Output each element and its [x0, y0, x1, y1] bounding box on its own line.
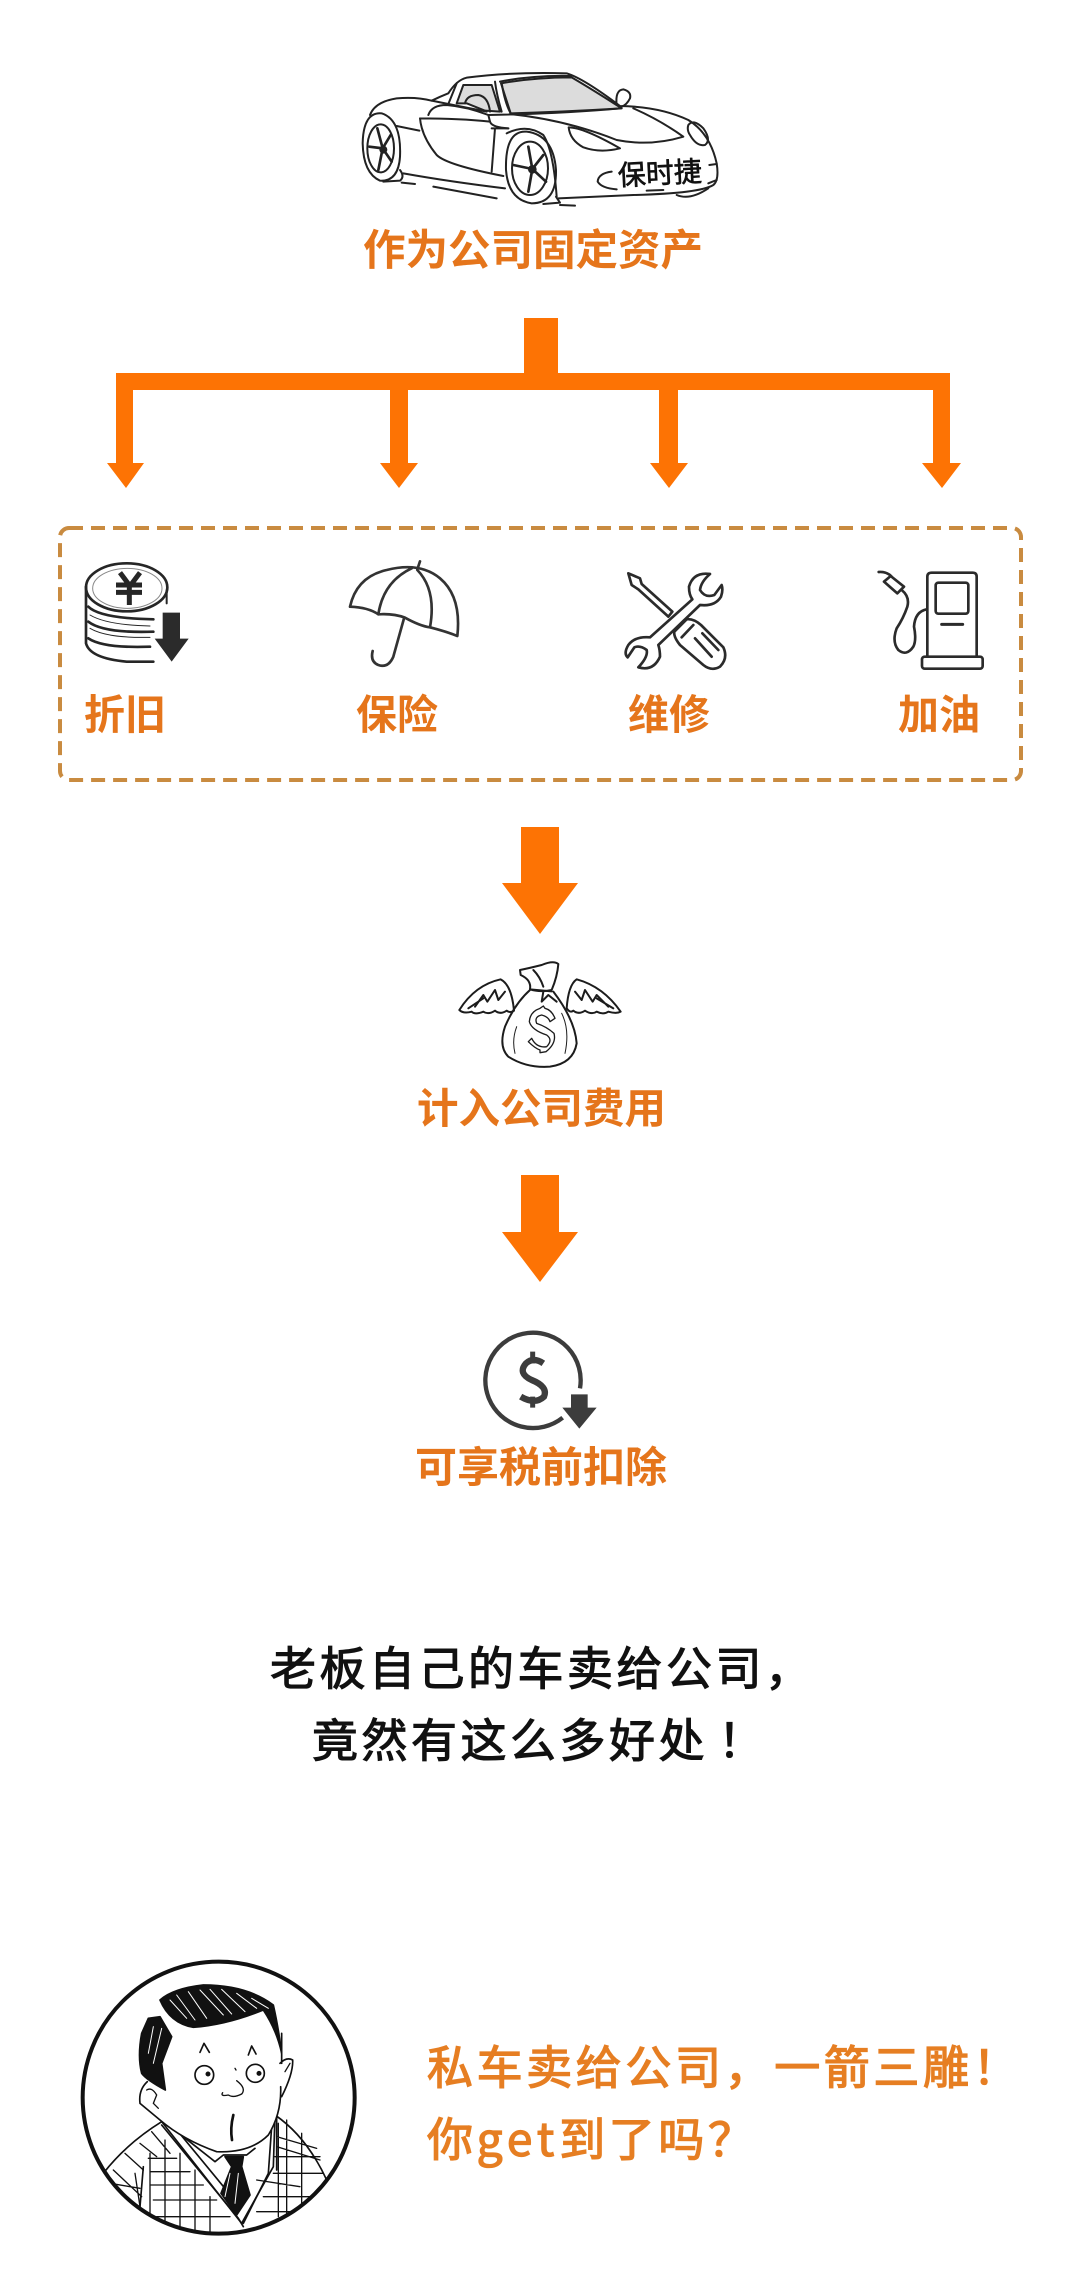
heading: fixed asset: 作为公司固定资产: [363, 228, 703, 275]
illustration: sports car: [362, 72, 718, 207]
icon: coins with down arrow: [84, 562, 189, 663]
portrait: surprised man: [80, 1960, 357, 2236]
callout: one arrow three eagles: 你get到了吗？: [427, 2104, 758, 2170]
label: insurance: 保险: [356, 692, 438, 738]
arrow: down to company expense: [502, 827, 578, 934]
jacket: [103, 2115, 327, 2240]
label: maintenance: 维修: [628, 692, 710, 738]
heading: company expense: 计入公司费用: [417, 1085, 666, 1132]
arrow: branching tree: [107, 318, 961, 488]
panel: cost items: [58, 526, 1023, 782]
face: [169, 2114, 276, 2136]
label: refuelling: 加油: [898, 692, 980, 738]
callout: one arrow three eagles: [426, 2032, 1022, 2170]
text block: benefits statement: [270, 1643, 814, 1767]
collar and tie: [183, 2137, 255, 2215]
arrow: down to pre-tax deduction: [502, 1175, 578, 1282]
icon: money bag with wings: [458, 961, 622, 1068]
car plate text: 保时捷: [617, 156, 703, 191]
icon: fuel pump: [877, 570, 984, 670]
callout: one arrow three eagles: 私车卖给公司，一箭三雕！: [427, 2032, 1022, 2098]
text block: benefits statement: 老板自己的车卖给公司，: [270, 1643, 814, 1695]
eyes, brows, nose, mouth: [195, 2066, 214, 2084]
label: depreciation: 折旧: [84, 692, 166, 738]
icon: wrench and screwdriver: [624, 572, 727, 670]
heading: pre-tax deduction: 可享税前扣除: [415, 1444, 667, 1491]
hair: [140, 1985, 282, 2090]
icon: dollar circle with down arrow: [483, 1330, 597, 1430]
text block: benefits statement: 竟然有这么多好处！: [312, 1715, 768, 1767]
icon: umbrella: [348, 560, 460, 668]
